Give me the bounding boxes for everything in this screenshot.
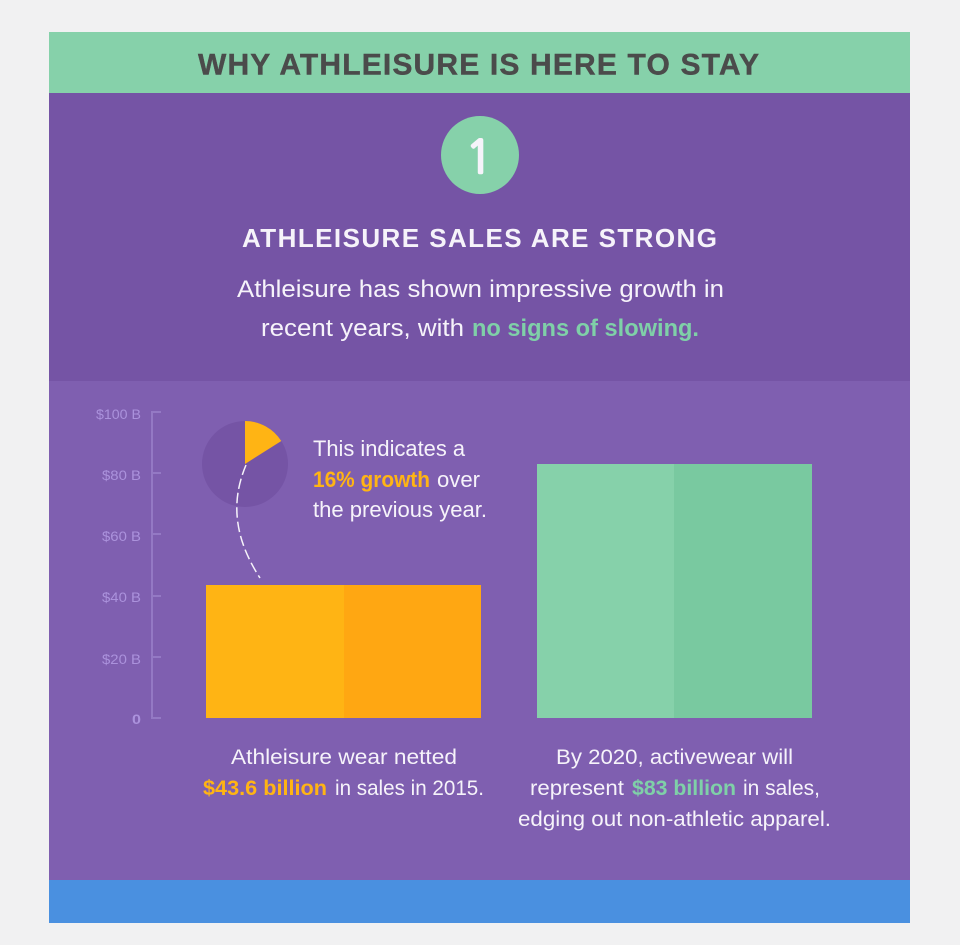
bar: 2020 activewear sales bbox=[537, 464, 812, 718]
growth callout: 16% growth bbox=[313, 467, 430, 492]
growth callout: the previous year. bbox=[313, 497, 487, 522]
panel: intro section bbox=[49, 93, 910, 381]
caption: 2020 forecast: $83 billion bbox=[632, 776, 736, 800]
intro text bbox=[237, 276, 724, 342]
caption: 2020 forecast bbox=[518, 745, 831, 831]
y axis: $20 B bbox=[102, 652, 141, 667]
caption: 2020 forecast: represent bbox=[530, 776, 624, 800]
panel: blue footer band bbox=[49, 880, 910, 923]
number badge bbox=[441, 116, 519, 194]
dashed connector bbox=[237, 465, 260, 578]
pie chart: 16% growth bbox=[202, 421, 288, 507]
caption: 2020 forecast: By 2020, activewear will bbox=[556, 745, 793, 769]
growth callout: over bbox=[437, 467, 480, 492]
y axis: $100 B bbox=[96, 407, 141, 422]
panel: chart section bbox=[49, 381, 910, 880]
growth callout bbox=[313, 436, 487, 522]
bar: 2015 athleisure sales bbox=[206, 585, 481, 718]
intro text: no signs of slowing. bbox=[472, 315, 699, 342]
number badge: 1 bbox=[466, 135, 493, 180]
growth callout: This indicates a bbox=[313, 436, 465, 461]
title banner: WHY ATHLEISURE IS HERE TO STAY bbox=[198, 48, 759, 82]
caption: 2020 forecast: in sales, bbox=[743, 776, 820, 800]
caption: 2015 sales: $43.6 billion bbox=[203, 776, 327, 800]
caption: 2015 sales: Athleisure wear netted bbox=[231, 745, 457, 769]
section heading: ATHLEISURE SALES ARE STRONG bbox=[242, 223, 717, 253]
y axis: 0 bbox=[132, 712, 141, 727]
title banner bbox=[49, 32, 910, 93]
caption: 2015 sales bbox=[203, 745, 484, 800]
y axis: $40 B bbox=[102, 590, 141, 605]
y axis: $60 B bbox=[102, 529, 141, 544]
y axis: $80 B bbox=[102, 468, 141, 483]
intro text: recent years, with bbox=[261, 315, 464, 342]
caption: 2020 forecast: edging out non-athletic apparel. bbox=[518, 807, 831, 831]
caption: 2015 sales: in sales in 2015. bbox=[335, 776, 484, 800]
y axis bbox=[96, 407, 161, 727]
intro text: Athleisure has shown impressive growth in bbox=[237, 276, 724, 303]
